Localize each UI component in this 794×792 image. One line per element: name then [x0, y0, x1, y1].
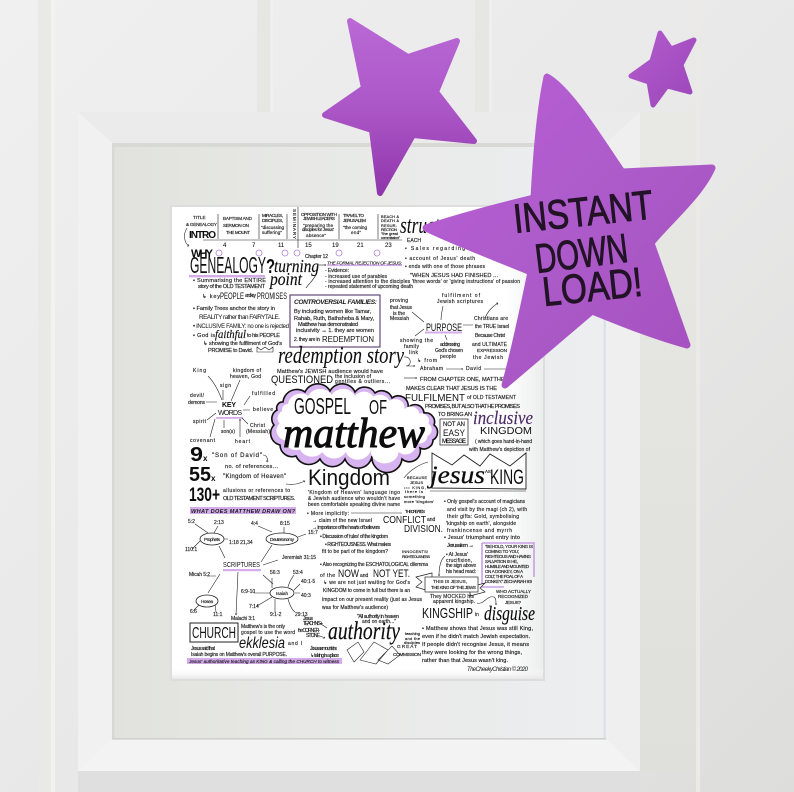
banner: this is jesus: THIS IS JESUS, — [433, 579, 467, 584]
section: kingdom: • Also recognizing the ESCHATOLOGICAL dilemma — [320, 562, 428, 568]
section: purpose: David — [466, 366, 481, 372]
panel: controversial families: Matthew has demonstrated — [298, 322, 358, 328]
heading: jesus as king crown — [404, 453, 526, 504]
banner: this is jesus: THE KING OF THE JEWS — [431, 585, 476, 590]
section: church: Isaiah begins on Matthew's overall PURPOSE. — [191, 652, 287, 658]
heading: kingship in disguise: • Matthew shows that Jesus was still King, — [422, 626, 533, 632]
section: kingdom: • RIGHTEOUSNESS. What makes — [325, 542, 392, 548]
section: purpose: Messiah — [390, 316, 409, 322]
section: kingdom: impact on our present reality (just as Jesus — [322, 597, 422, 603]
diagram: key words: (Messiah) — [246, 429, 270, 435]
timeline header: suffering" — [262, 230, 282, 235]
callout: zechariah quote: COMING TO YOU; — [485, 549, 519, 554]
section: kingdom: ↳ we are not just waiting for God's — [323, 580, 410, 586]
panel: controversial families: inclusivity → 1. they are women — [296, 328, 374, 334]
diagram: key words: devil/ — [190, 393, 205, 399]
heading: inclusive kingdom — [469, 408, 533, 453]
section: kingdom: KINGDOM to come in full but there is an — [323, 588, 410, 594]
timeline header: RESUR- — [381, 223, 398, 228]
section: kingship text: 'kingship on earth', alongside — [446, 521, 516, 527]
section: kingship text: their gifts: Gold, symbolising — [447, 514, 519, 520]
panel: controversial families: CONTROVERSIAL FAMILIES: — [294, 299, 377, 306]
banner: this is jesus: apparent kingship. — [433, 599, 475, 605]
section: kingdom: NOW — [338, 568, 359, 580]
section: authority: and the — [405, 636, 421, 641]
timeline header: DEATH & — [381, 218, 399, 223]
section: kingdom: • Discussion of 'rules' of the kingdom — [320, 534, 388, 540]
section: church: Jesus' authoritative teaching as KING & calling the CHURCH to witness — [188, 659, 340, 664]
section: kingship text: crucifixion, — [446, 558, 472, 564]
section: why genealogy: story of the OLD TESTAMENT — [198, 284, 266, 290]
section: why genealogy: WHY — [191, 248, 214, 260]
section: fulfilment text: FULFILMENT — [405, 393, 465, 404]
banner: this is jesus: They MOCKED his — [430, 594, 474, 600]
timeline header: TRAVEL TO — [343, 213, 364, 218]
callout: zechariah quote: COLT, THE FOAL OF A — [485, 574, 523, 579]
section: fulfilment text: TO BRING AN — [438, 412, 472, 418]
section: purpose: link — [409, 350, 418, 356]
picture frame — [78, 112, 640, 771]
section: why genealogy: to his PEOPLE — [247, 333, 280, 339]
diagram: key words: fulfilled — [252, 391, 275, 397]
timeline header: 7 — [252, 243, 256, 249]
section: authority — [298, 614, 422, 664]
section: purpose: the Jewish — [473, 355, 503, 361]
callout: zechariah quote — [482, 543, 534, 587]
section: chapter 12 rejection: - repeated statement of upcoming death — [325, 284, 413, 290]
timeline header: JEWISH LEADERS — [303, 216, 335, 221]
poster: Gospel of Matthew sketchnote — [170, 205, 545, 681]
section: kingdom: of the — [320, 573, 335, 579]
section: purpose: Christians are — [474, 316, 508, 322]
title: gospel of matthew cloud: matthew — [283, 411, 425, 457]
title: gospel of matthew cloud: OF — [369, 397, 387, 419]
section: church — [187, 623, 342, 664]
panel: controversial families: Rahab, Ruth, Bathsheba & Mary, — [294, 316, 374, 322]
section: fulfilment text: PROMISES, BUT ALSO THAT HE PROMISES — [425, 404, 520, 410]
heading: scriptures: SCRIPTURES — [223, 560, 260, 569]
timeline header: 4 — [223, 243, 227, 249]
callout: not an easy message — [440, 419, 468, 445]
text: instant: INSTANT — [511, 182, 655, 242]
section: authority: and on earth..." — [362, 619, 396, 625]
timeline header: & GENEALOGY — [186, 222, 217, 227]
section: kingdom: 'Kingdom of Heaven' language ingo — [308, 490, 400, 496]
section: purpose: people — [440, 354, 456, 360]
diagram: key words: spirit — [193, 419, 207, 425]
timeline header: "the coming — [343, 225, 367, 230]
section: structure: • account of Jesus' death — [405, 256, 475, 262]
section: why genealogy: • Summarising the ENTIRE — [193, 278, 266, 284]
section: kingdom: fit to be part of the kingdom? — [322, 549, 388, 555]
section: why genealogy: PEOPLE — [220, 291, 244, 301]
section: authority: disciples — [404, 640, 420, 645]
section: structure: • Sales regarding — [405, 246, 465, 252]
diagram: key words: son(s) — [221, 429, 235, 435]
section: authority: the CORNER- — [298, 628, 320, 634]
heading: kingship in disguise: rather than that Jesus wasn't king. — [422, 658, 508, 664]
timeline header: MIRACLES, — [262, 213, 283, 218]
heading: redemption story: gentiles & outliers... — [335, 379, 390, 385]
heading: jesus as king crown: AS — [485, 469, 491, 474]
section: why genealogy: • INCLUSIVE FAMILY: no one is rejected — [193, 324, 289, 330]
heading: jesus as king crown: ••• KING, — [404, 485, 426, 490]
callout: not an easy message: EASY — [443, 428, 465, 438]
section: why genealogy: faithful — [215, 327, 247, 341]
section: why genealogy — [189, 248, 289, 354]
heading: inclusive kingdom: inclusive — [473, 408, 533, 429]
heading: jesus as king crown: jesus — [427, 462, 485, 489]
section: purpose: fulfilment of — [442, 293, 481, 299]
section: kingship text: and visit by the magi (ch 2), with — [447, 507, 527, 513]
timeline header — [185, 207, 402, 256]
banner: this is jesus: JESUS? — [505, 600, 521, 605]
section: structure: structure — [400, 213, 462, 239]
section: kingship text: the sign above — [446, 563, 476, 569]
section: authority: Jesus — [303, 616, 314, 622]
section: kingdom: DIVISION. — [404, 524, 443, 535]
heading: turning point — [268, 256, 319, 289]
star: upper left — [325, 21, 474, 193]
star: instant download badge — [426, 77, 712, 385]
diagram: scriptures mind map: 8:15 — [280, 521, 290, 527]
diagram: key words: kingdom of — [233, 368, 262, 374]
section: kingship text — [439, 499, 527, 576]
section: chapter 12 rejection: - Evidence: — [325, 268, 349, 274]
section: structure: EACH — [407, 238, 421, 244]
section: fulfilment text: FROM CHAPTER ONE, MATTHEW — [420, 377, 511, 383]
stats: scripture references: no. of references... — [225, 464, 278, 470]
section: church: ekklesia — [239, 635, 285, 652]
timeline header: disciples for Jesus' — [302, 227, 334, 232]
heading: jesus as king crown: BECAUSE — [407, 475, 427, 480]
section: kingdom: and — [427, 517, 436, 523]
section: why genealogy: ? — [266, 256, 275, 278]
stats: scripture references: allusions or references to — [223, 488, 290, 494]
panel: controversial families: 2. they are in — [294, 337, 320, 343]
callout: zechariah quote: SALVATION IS HE, — [485, 559, 518, 564]
section: authority: "All authority in heaven — [357, 614, 399, 620]
timeline header: end" — [351, 230, 361, 235]
section: purpose: God's chosen — [435, 348, 463, 354]
panel: controversial families: By including women like Tamar, — [294, 309, 371, 315]
timeline header: 19 — [332, 243, 339, 249]
section: kingship text: his head read: — [446, 569, 476, 575]
heading: jesus as king crown: something — [404, 494, 425, 499]
diagram: scriptures mind map: Jeremiah 31:15 — [282, 555, 316, 561]
section: authority: STONE — [306, 633, 321, 639]
stats: scripture references — [189, 444, 296, 515]
cloud: prophets: Prophets — [204, 537, 221, 542]
section: purpose: showing the — [400, 338, 433, 344]
timeline header: BEACH & — [381, 214, 399, 219]
title: gospel of matthew cloud: GOSPEL — [294, 393, 351, 419]
stats: scripture references: 9 — [190, 444, 203, 466]
heading: kingship in disguise: even if he didn't match Jewish expectation. — [422, 634, 530, 640]
section: chapter 12 rejection: - increased attention to the disciples 'three words' or 'giving instructions' of passion — [325, 279, 520, 285]
heading: redemption story: Matthew's JEWISH audience would have — [277, 369, 383, 375]
heading: turning point: turning — [274, 256, 319, 276]
section: structure: "WHEN JESUS HAD FINISHED ... — [410, 273, 498, 279]
banner: this is jesus: WHO ACTUALLY — [496, 589, 531, 594]
diagram: scriptures mind map: 40:3 — [301, 593, 311, 599]
section: fulfilment text — [404, 377, 520, 418]
section: purpose: ↳ from — [417, 358, 437, 364]
diagram: scriptures mind map: 1:18 21,34 — [229, 540, 253, 546]
section: why genealogy: • God is — [193, 333, 215, 339]
heading: jesus as king crown: KING — [490, 466, 524, 489]
section: purpose: addressing — [440, 342, 460, 348]
timeline header: OPPOSITION WITH — [301, 212, 337, 217]
diagram: scriptures mind map: Micah 5:2 — [189, 572, 210, 578]
section: purpose: Because Christ — [475, 333, 506, 339]
cloud: isaiah: Isaiah — [276, 591, 288, 596]
heading: kingship in disguise: they were looking for the wrong things, — [422, 650, 522, 656]
heading: redemption story: QUESTIONED — [271, 374, 333, 386]
stats: scripture references: "Son of David" — [212, 453, 262, 459]
diagram: scriptures mind map: 29:13 — [295, 612, 308, 618]
callout: not an easy message: NOT AN — [443, 422, 465, 428]
timeline header: BAPTISM AND — [223, 216, 253, 221]
section: kingdom: CONFLICT — [383, 515, 426, 526]
section: kingdom: RIGHTEOUSNESS — [402, 554, 430, 559]
heading: turning point: point — [268, 269, 303, 289]
heading: kingship in disguise — [422, 603, 535, 673]
diagram: key words: demons — [188, 400, 206, 406]
text: down: DOWN — [532, 225, 630, 282]
stats: scripture references: "Kingdom of Heaven" — [223, 474, 286, 480]
section: purpose: that Jesus — [390, 305, 412, 311]
section: purpose: the TRUE Israel — [475, 324, 509, 330]
diagram: key words: King — [193, 368, 206, 374]
heading: intro: INTRO — [189, 230, 216, 241]
heading: jesus as king crown: JESUS — [410, 480, 423, 485]
diagram: scriptures mind map: 15:7 — [308, 530, 318, 536]
section: kingship text: • Only gospel's account of magicians — [444, 499, 526, 505]
cloud: hosea: Hosea — [201, 599, 213, 604]
diagram: scriptures mind map: Malachi 3:1 — [231, 616, 255, 622]
section: kingship text: frankincense and myrrh — [447, 528, 512, 534]
diagram: key words: heaven, God — [230, 374, 261, 380]
timeline header: absence" — [306, 233, 326, 238]
section: kingdom: • More implicitly: — [307, 511, 349, 517]
section: purpose: Jewish scriptures — [437, 299, 484, 305]
cloud: deuteronomy: Deuteronomy — [270, 537, 295, 542]
section: why genealogy: ↳ showing the fulfilment of God's — [203, 340, 282, 347]
credit: TheCheekyChristian © 2020 — [467, 666, 529, 673]
diagram: key words: sign — [220, 383, 231, 389]
section: kingdom: been comfortable speaking divine name — [308, 502, 400, 508]
section: church: Matthew's is the only — [241, 624, 286, 630]
section: kingdom: and — [360, 573, 369, 579]
diagram: scriptures mind map: 40:1-5 — [301, 579, 315, 585]
diagram: scriptures mind map: 6:6 — [190, 609, 197, 615]
heading: kingship in disguise: disguise — [484, 603, 535, 625]
section: kingdom — [286, 465, 443, 611]
timeline header: SEMINARY — [292, 209, 297, 239]
timeline header: "discussing — [261, 225, 284, 230]
timeline header: DISCIPLES, — [262, 218, 283, 223]
heading: purpose: PURPOSE — [426, 322, 462, 334]
diagram: key words: WORDS — [218, 410, 242, 417]
icon: crown — [257, 347, 273, 352]
timeline header: THE MOUNT — [226, 230, 250, 235]
section: kingship text: Jerusalem → — [447, 543, 474, 549]
section: fulfilment text: MAKES CLEAR THAT JESUS IS THE — [406, 386, 497, 392]
diagram: scriptures mind map: 2:13 — [214, 520, 224, 526]
section: kingship text: • Jesus' triumphant entry into — [444, 535, 520, 541]
diagram: scriptures mind map: 7:14 — [249, 604, 259, 610]
section: purpose: proving — [390, 298, 408, 304]
timeline header: "preparing the — [303, 223, 333, 228]
timeline header: 21 — [357, 243, 364, 249]
diagram: key words: believe — [253, 407, 273, 413]
section: kingdom: → claim of the new Israel — [312, 518, 372, 524]
diagram: scriptures mind map: 6:9-10 — [241, 589, 255, 595]
diagram: scriptures mind map: 5:2 — [188, 519, 195, 525]
diagram: scriptures mind map: 9:1-2 — [270, 612, 282, 618]
section: kingdom: Kingdom — [308, 465, 390, 490]
section: purpose: and ULTIMATE — [472, 342, 508, 348]
timeline header: "the great — [381, 231, 399, 236]
heading: kingship in disguise: If people didn't recognise Jesus, it means — [422, 642, 529, 648]
heading: jesus as king crown: there is — [405, 489, 423, 494]
section: why genealogy: PROMISE to David. — [208, 348, 253, 354]
timeline header: RECTION — [381, 227, 397, 232]
heading: inclusive kingdom: ( which goes hand-in-hand — [475, 439, 532, 445]
section: purpose: is the — [393, 311, 405, 317]
section: purpose: Abraham — [420, 366, 443, 372]
stats: scripture references: 55 — [189, 464, 211, 486]
panel: controversial families: REDEMPTION — [322, 335, 374, 344]
section: why genealogy: REALITY rather than FAIRYTALE. — [199, 314, 280, 321]
timeline header: 11 — [278, 243, 285, 249]
section: kingdom: was for Matthew's audience) — [322, 605, 388, 611]
heading: kingship in disguise: KINGSHIP — [422, 605, 473, 622]
heading: redemption story: the inclusion of — [335, 374, 372, 380]
heading: kingship in disguise: in — [475, 612, 479, 618]
diagram: key words: covenant — [190, 438, 216, 444]
heading: redemption story — [271, 343, 415, 386]
title: gospel of matthew cloud — [271, 384, 438, 473]
timeline header: 15 — [305, 243, 312, 249]
section: authority: COMMISSION — [393, 652, 422, 658]
heading: jesus as king crown: more 'kingdom' — [404, 499, 434, 504]
stats: scripture references: WHAT DOES MATTHEW DRAW ON? — [191, 509, 296, 515]
timeline header: commission" — [381, 235, 401, 240]
section: kingdom: & Jewish audience who wouldn't have — [308, 496, 400, 502]
section: chapter 12 rejection: - increased use of parables — [325, 274, 388, 280]
section: structure — [400, 213, 498, 279]
section: church: CHURCH — [192, 625, 236, 642]
banner: this is jesus — [416, 573, 531, 605]
section: church: gospel to use the word — [241, 630, 295, 636]
section: purpose: EXPRESSION — [477, 348, 507, 353]
section: authority: Jesus as mountains — [310, 646, 338, 652]
heading: redemption story: redemption story — [278, 343, 404, 369]
section: fulfilment text: of OLD TESTAMENT — [467, 395, 516, 401]
section: church: and I — [288, 641, 302, 647]
section: church: Jesus said that — [191, 646, 216, 652]
section: authority: GREAT — [397, 644, 417, 650]
section: authority: authority — [328, 618, 401, 645]
callout: zechariah quote: DONKEY." ZECHARIAH 9:9 — [485, 579, 533, 584]
callout: zechariah quote: ON A DONKEY, ON A — [485, 569, 523, 574]
section: chapter 12 rejection: Chapter 12 — [305, 254, 328, 260]
section: purpose: family — [404, 344, 420, 350]
diagram: scriptures mind map — [185, 519, 318, 622]
section: why genealogy: • Family Trees anchor the story in — [193, 306, 275, 312]
diagram: scriptures mind map: 4:4 — [251, 521, 258, 527]
section: kingdom: NOT YET. — [373, 568, 410, 580]
callout: zechariah quote: "BEHOLD, YOUR KING IS — [485, 544, 533, 549]
section: purpose — [390, 293, 510, 372]
section: kingship text: • At Jesus' — [446, 552, 468, 558]
section: kingdom: INNOCENTS/ — [402, 549, 429, 554]
diagram: scriptures mind map: 56:3 — [270, 570, 280, 576]
stats: scripture references: OLD TESTAMENT SCRIPTURES. — [223, 496, 295, 502]
section: authority: teaching — [405, 631, 420, 636]
diagram: key words: heart — [235, 439, 251, 445]
heading: inclusive kingdom: KINGDOM — [480, 426, 532, 437]
timeline header: TITLE — [193, 215, 206, 220]
diagram: scriptures mind map: 53:4 — [293, 570, 303, 576]
callout: zechariah quote: HUMBLE AND MOUNTED — [485, 564, 529, 569]
text: load: LOAD! — [540, 259, 644, 315]
section: kingdom: THIS CREATES — [405, 509, 425, 514]
stats: scripture references: 130+ — [189, 485, 220, 506]
section: why genealogy: ↳ key — [202, 293, 220, 300]
section: chapter 12 rejection — [305, 254, 520, 290]
timeline header: SERMON ON — [223, 223, 249, 228]
diagram: scriptures mind map: 110:1 — [185, 547, 197, 553]
timeline header: 23 — [385, 243, 392, 249]
diagram: key words: Christ — [250, 423, 266, 429]
heading: key words: KEY — [222, 402, 236, 409]
section: authority: ↳ taking in a place — [310, 653, 339, 659]
stats: scripture references: x — [211, 474, 216, 483]
section: authority: TEACHING + — [303, 621, 323, 627]
section: kingdom: → importance of the hearts of believers — [312, 525, 380, 531]
timeline header: JERUSALEM — [343, 218, 366, 223]
heading: genealogy: GENEALOGY — [190, 252, 266, 278]
section: structure: • ends with one of those phrases — [405, 264, 486, 270]
section: chapter 12 rejection: THE FORMAL REJECTION OF JESUS: — [327, 260, 403, 266]
heading: inclusive kingdom: with Matthew's depiction of — [469, 447, 531, 453]
section: why genealogy: PROMISES — [257, 291, 287, 301]
diagram: scriptures mind map: 11:1 — [213, 612, 223, 618]
callout: not an easy message: MESSAGE — [442, 439, 466, 445]
stats: scripture references: x — [203, 454, 208, 463]
section: why genealogy: and key — [245, 293, 256, 299]
star: small upper right — [631, 33, 694, 105]
panel: controversial families — [290, 295, 380, 347]
banner: this is jesus: RECOGNIZED — [498, 594, 529, 599]
callout: zechariah quote: RIGHTEOUS AND HAVING — [485, 554, 532, 559]
diagram: key words — [188, 368, 275, 445]
